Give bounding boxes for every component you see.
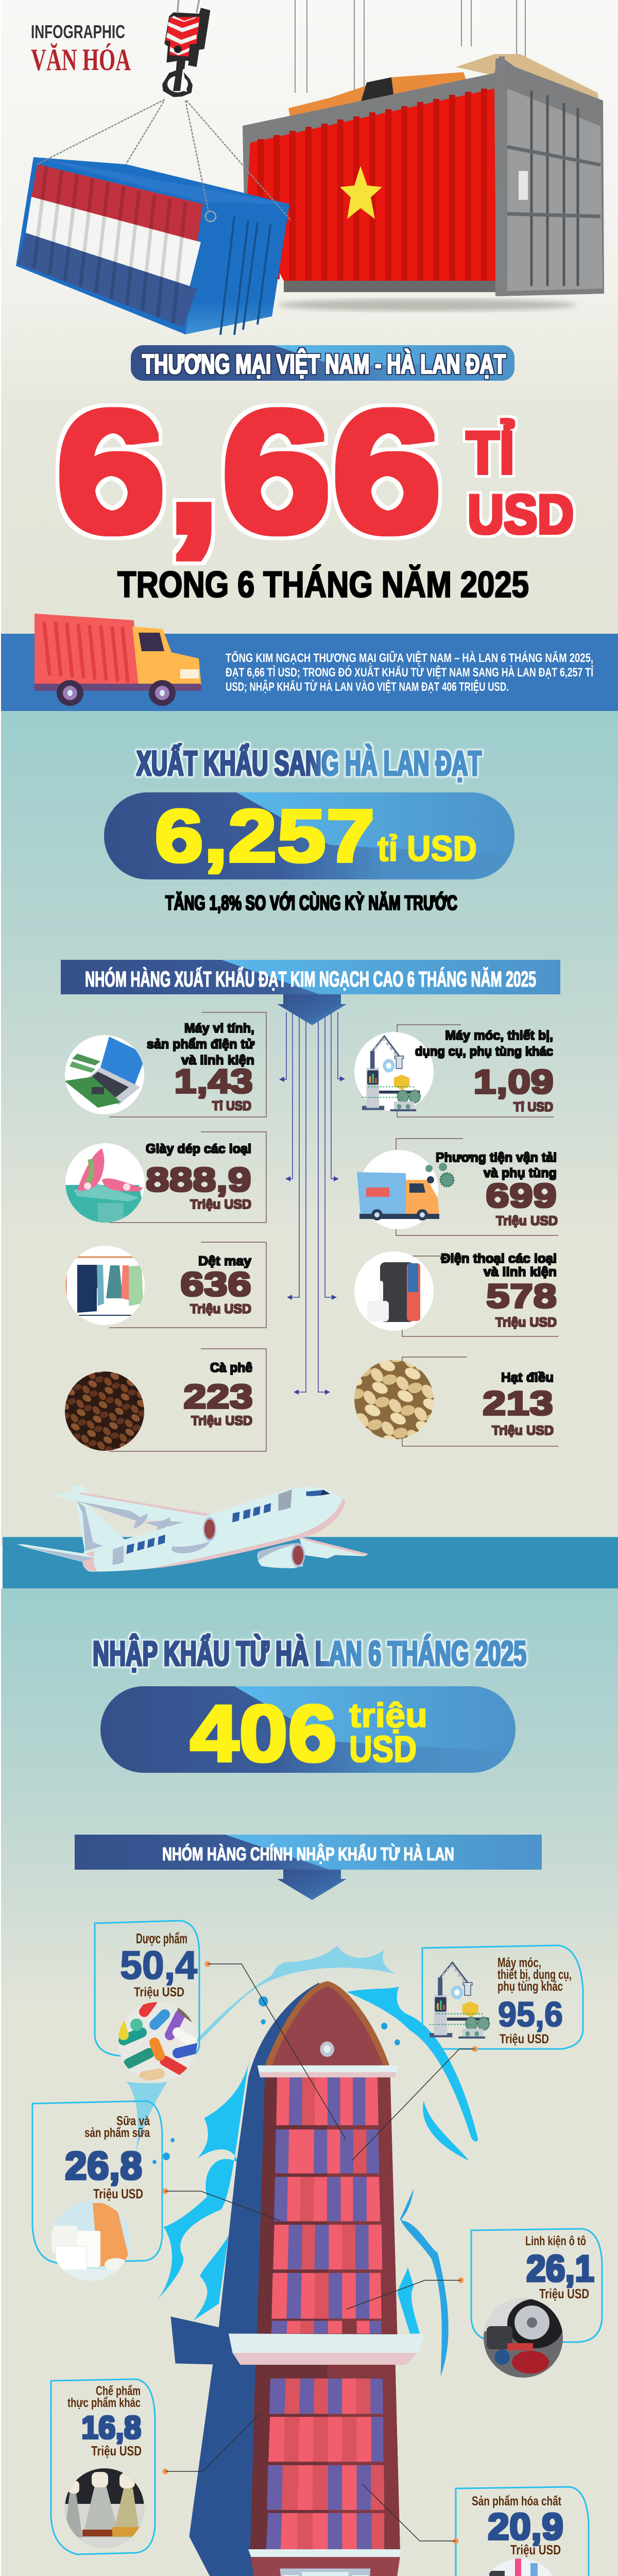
ship bow bbox=[265, 1981, 389, 2065]
item: phones: Triệu USD bbox=[495, 1315, 557, 1330]
callout: chemicals: Sản phẩm hóa chất bbox=[472, 2494, 562, 2509]
stern bbox=[248, 2549, 402, 2576]
growth note: TĂNG 1,8% SO VỚI CÙNG KỲ NĂM TRƯỚC bbox=[165, 891, 457, 914]
item: phones: Điện thoại các loại bbox=[441, 1251, 557, 1266]
item: coffee bbox=[65, 1349, 266, 1451]
pill: import value bbox=[100, 1686, 516, 1778]
banner: import groups: NHÓM HÀNG CHÍNH NHẬP KHẨU TỪ HÀ LAN bbox=[162, 1843, 454, 1865]
callout: food preparations: Triệu USD bbox=[91, 2443, 142, 2459]
item: cashew: Triệu USD bbox=[492, 1423, 554, 1438]
item: textiles bbox=[64, 1242, 266, 1328]
arrow down bbox=[277, 994, 347, 1025]
callout: machinery: Triệu USD bbox=[500, 2032, 549, 2046]
item: coffee: Cà phê bbox=[210, 1361, 252, 1375]
callout: machinery: thiết bị, dụng cụ, bbox=[497, 1967, 572, 1982]
container shadow bbox=[278, 299, 577, 311]
item: cashew: Hạt điều bbox=[501, 1370, 554, 1385]
splash bbox=[126, 1946, 478, 2576]
title pill bbox=[131, 345, 514, 381]
item: vehicles bbox=[357, 1139, 558, 1235]
lower hull bbox=[250, 2365, 400, 2549]
logo: VĂN HÓA bbox=[31, 43, 131, 77]
summary text bbox=[226, 651, 593, 694]
callout: auto parts bbox=[347, 2229, 602, 2378]
water band bbox=[3, 1537, 618, 1588]
item: machinery: Tỉ USD bbox=[513, 1100, 553, 1114]
hero image: cranes and containers bbox=[16, 0, 604, 335]
big number: 6,66: 6,66 bbox=[56, 375, 442, 568]
item: computers: Tỉ USD bbox=[212, 1099, 251, 1113]
summary text: USD; NHẬP KHẨU TỪ HÀ LAN VÀO VIỆT NAM ĐẠT 406 TRIỆU USD. bbox=[226, 680, 509, 694]
item: textiles: Triệu USD bbox=[190, 1302, 251, 1316]
crane chains bbox=[36, 99, 291, 221]
crane cables bbox=[295, 0, 525, 103]
callout: pharmaceuticals: 50,4 bbox=[120, 1943, 197, 1988]
ship shadow bbox=[170, 1982, 319, 2576]
upper containers bbox=[271, 2077, 382, 2334]
banner: import groups bbox=[75, 1835, 542, 1870]
callout: machinery: Máy móc, bbox=[497, 1955, 541, 1970]
item: computers: 1,43 bbox=[174, 1062, 253, 1100]
logo: INFOGRAPHIC bbox=[31, 21, 125, 42]
pill: import value: USD bbox=[349, 1729, 417, 1770]
item: computers: và linh kiện bbox=[181, 1053, 254, 1067]
item: computers bbox=[64, 1012, 266, 1117]
callout: dairy: sản phẩm sữa bbox=[84, 2126, 150, 2140]
item: machinery: Máy móc, thiết bị, bbox=[445, 1028, 553, 1043]
item: coffee: 223 bbox=[183, 1378, 253, 1415]
item: phones: 578 bbox=[486, 1277, 557, 1315]
callout: chemicals: 20,9 bbox=[488, 2506, 563, 2548]
unit: tỉ: TỈ bbox=[466, 419, 514, 486]
star bbox=[340, 166, 382, 219]
callout: auto parts: Linh kiện ô tô bbox=[525, 2234, 586, 2248]
subtitle: TRONG 6 THÁNG NĂM 2025 bbox=[117, 565, 529, 605]
callout: machinery: 95,6 bbox=[498, 1995, 563, 2034]
callout: dairy bbox=[32, 2101, 280, 2282]
callout: pharmaceuticals: Triệu USD bbox=[134, 1985, 184, 1999]
callout: dairy: 26,8 bbox=[65, 2144, 142, 2188]
lower containers bbox=[266, 2379, 384, 2549]
item: machinery bbox=[354, 1025, 554, 1117]
item: cashew bbox=[354, 1357, 558, 1446]
callout: pharmaceuticals bbox=[95, 1921, 346, 2139]
item: phones: và linh kiện bbox=[484, 1265, 557, 1279]
icon: truck bbox=[34, 614, 201, 706]
deck bbox=[229, 2065, 425, 2374]
icon: airplane bbox=[17, 1485, 368, 1572]
item: machinery: dụng cụ, phụ tùng khác bbox=[415, 1044, 553, 1059]
item: textiles: Dệt may bbox=[198, 1254, 251, 1268]
item: coffee: Triệu USD bbox=[191, 1414, 252, 1428]
logo bbox=[31, 21, 131, 77]
container: Netherlands bbox=[16, 157, 289, 335]
pill: import value: triệu bbox=[349, 1696, 427, 1734]
item: machinery: 1,09 bbox=[473, 1063, 554, 1100]
item: cashew: 213 bbox=[483, 1384, 553, 1422]
crane hook bbox=[162, 0, 210, 97]
arrow down bbox=[277, 1870, 347, 1900]
container: Vietnam bbox=[243, 54, 604, 296]
item: vehicles: và phụ tùng bbox=[484, 1166, 557, 1180]
item: computers: sản phẩm điện tử bbox=[147, 1037, 255, 1052]
item: phones bbox=[354, 1251, 558, 1336]
item: textiles: 636 bbox=[180, 1265, 251, 1303]
upper hull bbox=[257, 2076, 397, 2336]
callout: pharmaceuticals: Dược phẩm bbox=[136, 1930, 187, 1946]
pill: export value: 6,257 bbox=[154, 794, 375, 877]
callout: machinery: phụ tùng khác bbox=[497, 1978, 563, 1994]
item: footwear: 888,9 bbox=[146, 1161, 251, 1198]
item: computers: Máy vi tính, bbox=[184, 1021, 254, 1036]
callout: food preparations bbox=[51, 2379, 260, 2554]
item: footwear: Giày dép các loại bbox=[146, 1142, 251, 1156]
callout: chemicals bbox=[362, 2484, 589, 2576]
callout: auto parts: Triệu USD bbox=[539, 2286, 589, 2301]
summary band bbox=[1, 634, 618, 711]
item: vehicles: Phương tiện vận tải bbox=[436, 1150, 557, 1165]
callout: auto parts: 26,1 bbox=[526, 2248, 594, 2290]
callout: dairy: Triệu USD bbox=[93, 2186, 143, 2201]
callout: chemicals: Triệu USD bbox=[510, 2542, 561, 2557]
item: vehicles: Triệu USD bbox=[496, 1214, 558, 1228]
pill: export value bbox=[104, 792, 514, 879]
unit: USD: USD bbox=[468, 483, 574, 545]
item: vehicles: 699 bbox=[486, 1177, 557, 1214]
banner: export groups bbox=[61, 960, 560, 994]
callout: food preparations: 16,8 bbox=[81, 2410, 141, 2446]
pill: export value: tỉ USD bbox=[377, 828, 477, 869]
item: footwear: Triệu USD bbox=[190, 1197, 251, 1212]
callout: machinery bbox=[352, 1945, 583, 2161]
connector lines bbox=[279, 1012, 345, 1395]
ship with splash bbox=[126, 1946, 478, 2576]
callout: food preparations: Chế phẩm bbox=[96, 2384, 141, 2398]
pill: import value: 406 bbox=[190, 1689, 337, 1778]
item: footwear bbox=[62, 1132, 266, 1226]
callout: dairy: Sữa và bbox=[116, 2114, 150, 2128]
callout: food preparations: thực phẩm khác bbox=[67, 2396, 141, 2410]
